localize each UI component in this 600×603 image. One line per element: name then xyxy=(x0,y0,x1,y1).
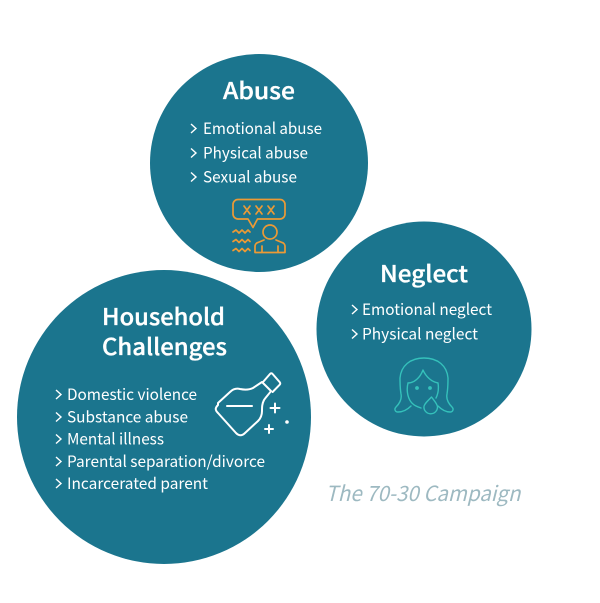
heading: household challenges: Household xyxy=(102,298,225,332)
heading: neglect: Neglect xyxy=(380,255,468,289)
icon: crying face xyxy=(395,358,453,414)
list: abuse types: Sexual abuse xyxy=(203,166,297,188)
list: abuse types: Emotional abuse xyxy=(203,117,322,139)
list: household challenges: Domestic violence xyxy=(67,383,197,405)
list: neglect types xyxy=(352,298,492,344)
list: household challenges: Parental separation/divorce xyxy=(67,450,265,472)
list: household challenges: Mental illness xyxy=(67,428,164,450)
list: abuse types: Physical abuse xyxy=(203,142,308,164)
list: household challenges: Incarcerated parent xyxy=(67,472,208,494)
icon: speech bubble and person xyxy=(233,200,285,252)
icon: bottle xyxy=(216,373,289,435)
heading: household challenges: Challenges xyxy=(102,328,227,362)
list: neglect types: Emotional neglect xyxy=(362,298,492,320)
list: household challenges xyxy=(56,383,265,494)
list: abuse types xyxy=(191,117,322,188)
panel: neglect xyxy=(316,222,532,436)
panel: abuse xyxy=(150,54,368,272)
caption: campaign name: The 70-30 Campaign xyxy=(326,478,522,508)
heading: abuse: Abuse xyxy=(223,72,295,106)
heading: household challenges xyxy=(102,298,227,362)
list: neglect types: Physical neglect xyxy=(362,322,478,344)
list: household challenges: Substance abuse xyxy=(67,406,188,428)
panel: household challenges xyxy=(17,270,311,564)
